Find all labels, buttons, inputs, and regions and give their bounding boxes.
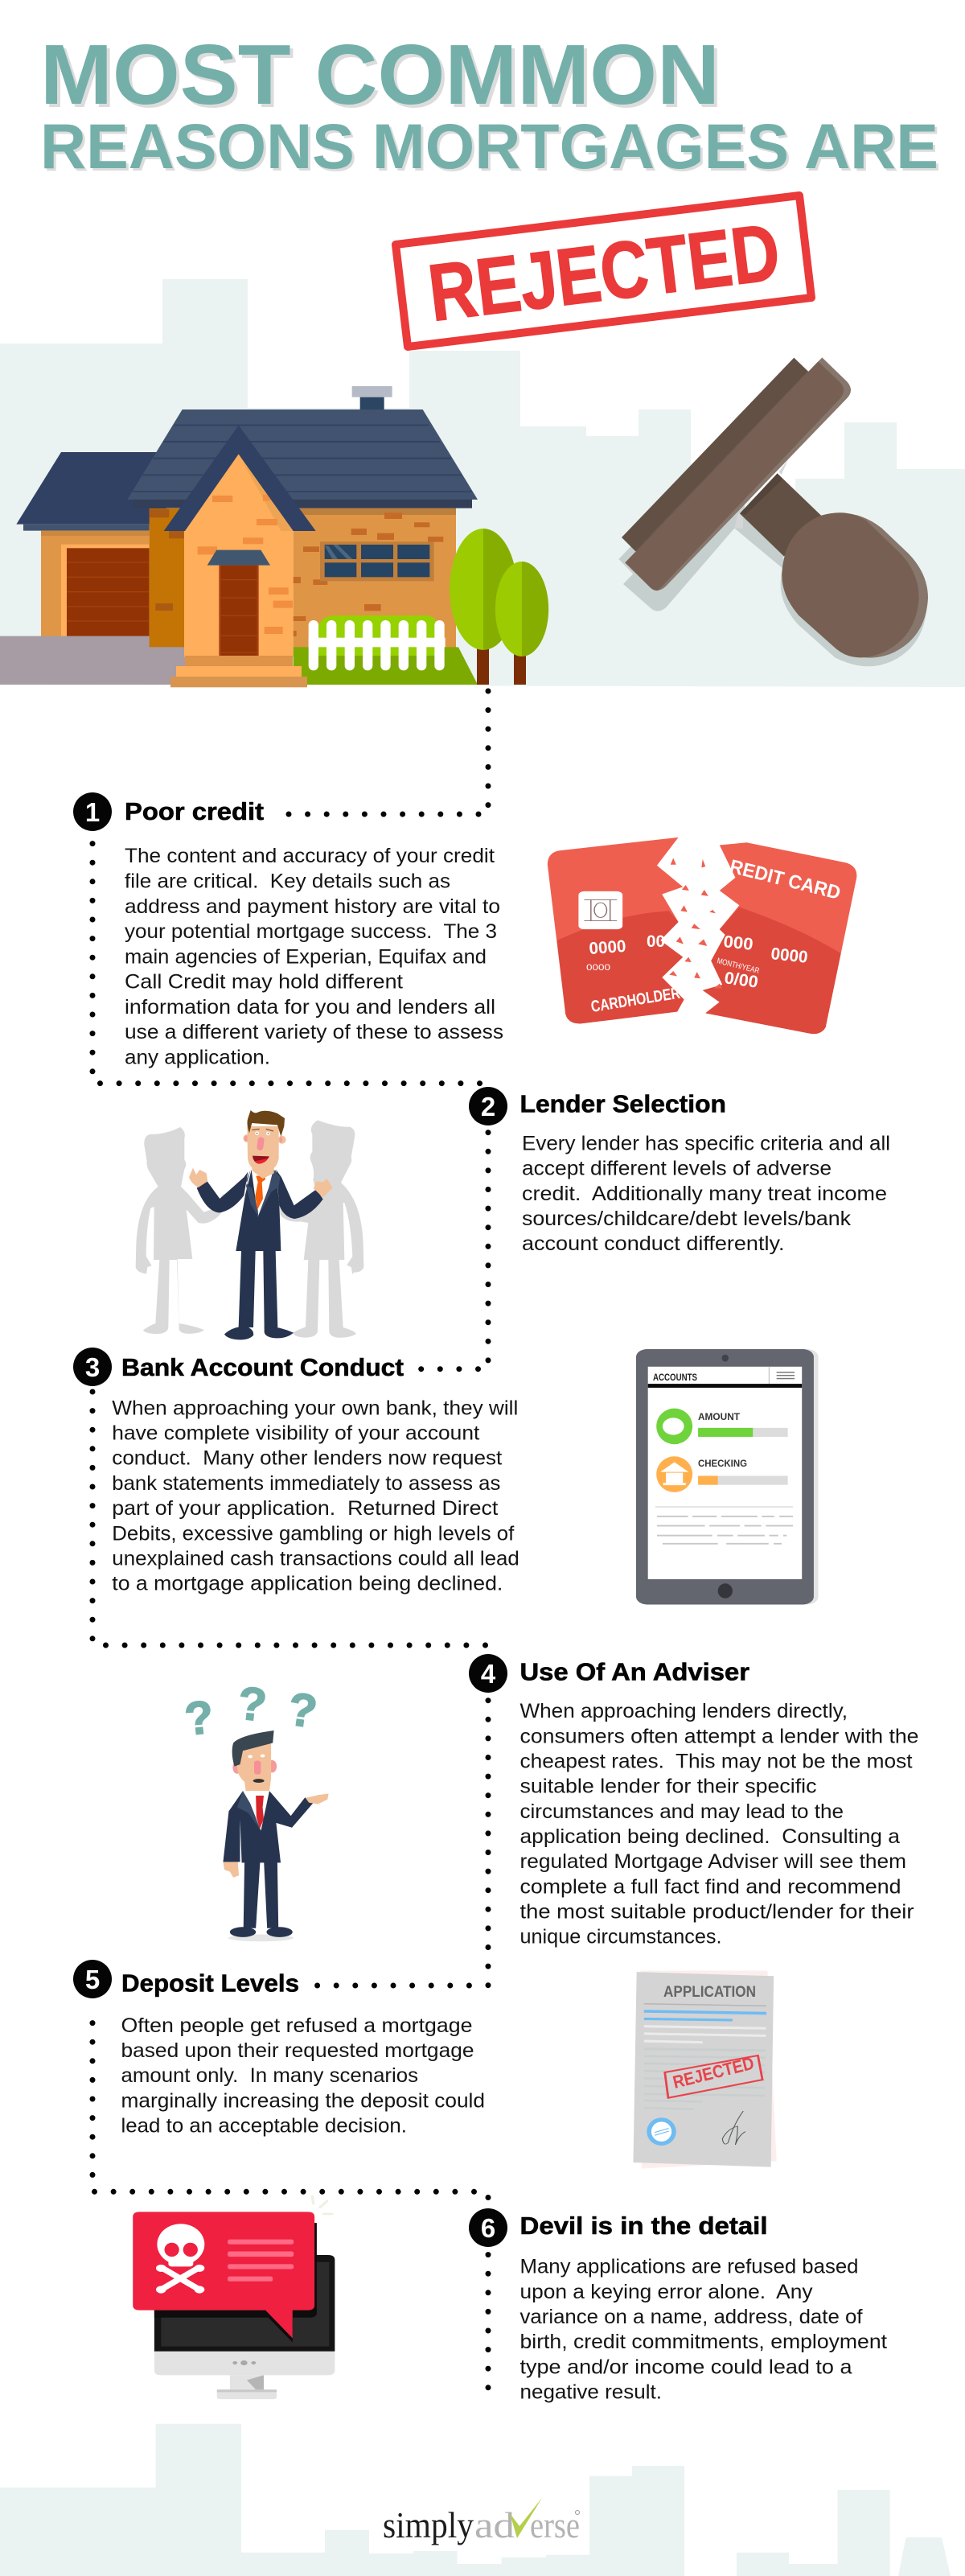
step 4 body text: application being declined. Consulting a: [519, 1825, 900, 1848]
step 2 body text: accept different levels of adverse: [522, 1157, 832, 1179]
step 6 body text: type and/or income could lead to a: [519, 2356, 852, 2378]
logo: simply adverse: erse: [530, 2504, 580, 2545]
illustration: confused man with question marks: ?: [236, 1677, 269, 1732]
step 3 number badge: 3: [85, 1352, 100, 1382]
illustration: confused man with question marks: [183, 1677, 329, 1941]
step 4 body text: suitable lender for their specific: [519, 1776, 817, 1798]
logo: simply adverse: simply: [383, 2504, 474, 2545]
bottom skyline background: [0, 2424, 951, 2576]
illustration: torn credit card: 000: [722, 932, 754, 954]
step 4 body text: cheapest rates. This may not be the most: [519, 1751, 913, 1773]
title: [40, 27, 941, 184]
step 5 body text: [121, 2014, 485, 2138]
step 5 body text: based upon their requested mortgage: [121, 2039, 474, 2062]
illustration: torn credit card: [548, 837, 856, 1034]
step 4 body text: complete a full fact find and recommend: [519, 1876, 901, 1899]
step 4 heading: Use Of An Adviser: [519, 1657, 749, 1686]
step 5 body text: Often people get refused a mortgage: [121, 2014, 473, 2037]
illustration: torn credit card: MONTH/YEAR: [716, 957, 760, 976]
step 5 body text: marginally increasing the deposit could: [121, 2089, 485, 2112]
step 1 body text: The content and accuracy of your credit: [125, 845, 495, 867]
step 2 body text: Every lender has specific criteria and all: [522, 1132, 890, 1154]
step 1 number badge: 1: [85, 797, 100, 827]
step 3 body text: [112, 1397, 519, 1595]
illustration: torn credit card: REDIT CARD: [728, 856, 843, 904]
step 6 body text: [519, 2256, 887, 2404]
illustration: tablet with accounts screen: [636, 1349, 819, 1604]
illustration: rubber stamp: [618, 357, 928, 666]
title: MOST COMMON: [40, 27, 720, 122]
step 3 body text: When approaching your own bank, they will: [112, 1397, 518, 1419]
step 2 number badge: 2: [481, 1092, 495, 1121]
step 4 body text: consumers often attempt a lender with the: [519, 1725, 918, 1747]
step 4 body text: [519, 1700, 918, 1948]
step 2 heading: Lender Selection: [519, 1089, 726, 1118]
step 4 number badge: 4: [481, 1659, 496, 1689]
step 3 body text: conduct. Many other lenders now request: [112, 1446, 502, 1469]
step 2 body text: credit. Additionally many treat income: [522, 1183, 887, 1205]
illustration: rejected application form: REJECTED: [671, 2053, 756, 2092]
step 3 heading: Bank Account Conduct: [121, 1353, 404, 1381]
step 1 body text: your potential mortgage success. The 3: [125, 920, 497, 943]
step 2 body text: [522, 1132, 890, 1255]
logo: simply adverse: ad: [474, 2504, 515, 2545]
step 3 body text: unexplained cash transactions could all lead: [112, 1548, 519, 1570]
step 3 body text: to a mortgage application being declined.: [112, 1572, 503, 1595]
illustration: computer warning message with skull: [133, 2196, 335, 2399]
illustration: trees: [450, 529, 548, 685]
title: REASONS MORTGAGES ARE: [40, 110, 938, 182]
step 6 number badge: 6: [481, 2213, 495, 2243]
illustration: tablet with accounts screen: ACCOUNTS: [653, 1372, 697, 1383]
step 1 number badge: [73, 792, 112, 831]
illustration: tablet with accounts screen: CHECKING: [698, 1458, 747, 1469]
step 4 body text: When approaching lenders directly,: [519, 1700, 848, 1722]
step 4 body text: the most suitable product/lender for their: [519, 1901, 914, 1924]
top skyline background: [0, 279, 965, 687]
step 5 number badge: 5: [85, 1965, 100, 1994]
step 3 number badge: [73, 1348, 112, 1386]
title: REASONS MORTGAGES ARE: [43, 113, 941, 184]
step 6 heading: Devil is in the detail: [519, 2212, 767, 2240]
rejected stamp mark: REJECTED: [424, 207, 784, 339]
illustration: torn credit card: 0000: [589, 937, 626, 958]
step 3 body text: have complete visibility of your account: [112, 1422, 479, 1444]
dotted connector path: [92, 691, 488, 2389]
step 6 number badge: [469, 2208, 507, 2247]
step 1 body text: use a different variety of these to assess: [125, 1021, 503, 1043]
illustration: confused man with question marks: ?: [285, 1683, 320, 1739]
illustration: house: [0, 386, 478, 687]
step 5 body text: lead to an acceptable decision.: [121, 2115, 407, 2138]
step 1 body text: main agencies of Experian, Equifax and: [125, 945, 487, 968]
step 2 body text: sources/childcare/debt levels/bank: [522, 1208, 852, 1230]
step 6 body text: birth, credit commitments, employment: [519, 2331, 887, 2353]
step 5 number badge: [73, 1960, 112, 1998]
step 2 body text: account conduct differently.: [522, 1232, 785, 1255]
step 1 body text: Call Credit may hold different: [125, 971, 403, 994]
step 4 body text: unique circumstances.: [519, 1926, 722, 1948]
illustration: torn credit card: 0000: [770, 944, 809, 967]
step 4 body text: regulated Mortgage Adviser will see them: [519, 1850, 906, 1873]
illustration: rejected application form: APPLICATION: [663, 1984, 756, 2001]
illustration: rejected application form: [633, 1971, 777, 2169]
step 3 body text: bank statements immediately to assess as: [112, 1472, 500, 1495]
step 1 body text: [125, 845, 503, 1068]
step 1 body text: file are critical. Key details such as: [125, 870, 450, 893]
step 6 body text: Many applications are refused based: [519, 2256, 859, 2278]
step 5 body text: amount only. In many scenarios: [121, 2064, 418, 2087]
step 1 body text: address and payment history are vital to: [125, 895, 500, 918]
logo: simply adverse: [383, 2498, 580, 2545]
step 6 body text: upon a keying error alone. Any: [519, 2281, 813, 2303]
step 4 number badge: [469, 1654, 507, 1693]
step 3 body text: part of your application. Returned Direct: [112, 1497, 498, 1520]
step 1 body text: information data for you and lenders all: [125, 996, 495, 1018]
illustration: confused man with question marks: ?: [183, 1691, 216, 1746]
step 1 heading: Poor credit: [125, 797, 264, 825]
step 4 body text: circumstances and may lead to the: [519, 1800, 844, 1823]
step 1 body text: any application.: [125, 1046, 270, 1068]
illustration: torn credit card: 0000: [586, 963, 610, 973]
illustration: businessman with grey silhouettes: [136, 1110, 363, 1339]
illustration: tablet with accounts screen: AMOUNT: [698, 1411, 741, 1422]
step 3 body text: Debits, excessive gambling or high levels of: [112, 1522, 514, 1545]
step 2 number badge: [469, 1087, 507, 1125]
illustration: torn credit card: 0/00: [723, 969, 759, 992]
step 6 body text: variance on a name, address, date of: [519, 2306, 863, 2328]
illustration: torn credit card: CARDHOLDER: [589, 985, 682, 1016]
illustration: torn credit card: 00: [647, 932, 665, 951]
step 5 heading: Deposit Levels: [121, 1969, 299, 1998]
title: MOST COMMON: [43, 31, 723, 126]
step 6 body text: negative result.: [519, 2381, 662, 2404]
